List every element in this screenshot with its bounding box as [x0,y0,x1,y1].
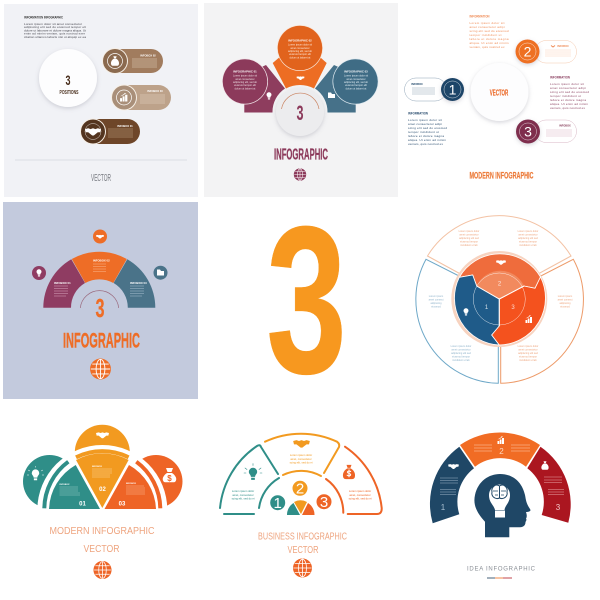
icon: globe [90,359,111,379]
sector: orange 02: 02 [99,487,106,493]
badges: 2 [296,481,304,498]
text blocks: incididunt ut lab [452,359,470,362]
text: information navy: aliqua. Ut enim ad minim [408,138,446,142]
circle: item 01: Lorem ipsum dolor sit [233,74,257,78]
sector: red 03 [104,465,156,509]
icon: folder badge [154,266,168,280]
circle: item 01: eiusmod tempor elit [234,84,256,87]
badges: 1 [274,495,282,512]
text: information orange: tempor incididunt ut [470,33,502,37]
person mini chart [287,500,315,515]
circle: item 02: INFOGRAPHIC 02 [288,38,312,42]
subtitle: vector: VECTOR [288,545,318,556]
circle: item 03: Lorem ipsum dolor sit [344,74,368,78]
heading: information infographic: enim ad minim veniam, quis nostrud exer [24,32,85,36]
outline: right segment [501,259,583,383]
text: information maroon [550,76,589,110]
bulb with brain [489,484,510,518]
circle: item 03: dolum ut laboret at [346,88,367,90]
icon: bag [526,315,532,323]
outline: teal [220,445,279,514]
segment: red 3: 3 [556,503,561,512]
title: idea infographic: IDEA INFOGRAPHIC [467,566,536,572]
text: information orange: labore et dolore magna [470,37,509,41]
panel: three positions brown [4,4,198,197]
text blocks [429,230,573,362]
text: information maroon: aliqua. Ut enim ad minim [550,102,588,106]
pill: item 03 [111,84,171,110]
text blocks: Lorem ipsum dolor [232,489,254,493]
title: infographic: INFOGRAPHIC [63,330,140,352]
icon: folder [328,92,335,98]
text blocks: adipiscing [559,302,571,305]
icon: bulb badge [32,266,46,280]
dome: teal [23,455,76,508]
arc accent [80,291,119,308]
sector: orange 02: INFOBOX [92,466,103,468]
numbers: 2 [498,282,502,288]
icon: globe [294,168,306,181]
sector: red 03: INFOBOX [126,483,137,485]
dome: orange [75,425,130,480]
text blocks: Lorem ipsum dolor [290,453,312,457]
pill: item 3: 3 [524,124,532,140]
circle: item 03: adipiscing elit, sed do [344,81,369,84]
text blocks: eiusmod tempor [452,356,470,358]
icon: bulb [464,308,468,316]
segment labels [54,258,147,296]
pill: item 1 [404,78,464,101]
segment labels: INFOBOX 03 [130,281,147,285]
segment: navy 1 [430,447,474,523]
pill: item 02: INFOBOX 02 [140,54,156,58]
heading: information infographic [24,16,86,39]
segment: navy 1: 1 [441,503,446,512]
panel: three circles infographic: INFOGRAPHIC [274,146,328,164]
text: information navy: INFORMATION [408,112,428,116]
icon: bag [163,468,176,483]
segment: blue [315,65,356,112]
segment: maroon [43,259,85,308]
icon: globe [293,558,312,578]
text blocks: adipiscing elit sed [518,237,538,240]
underline accent [487,577,512,579]
pill: item 3 [516,120,576,144]
circle: item 02: dolum ut laboret at [290,56,311,60]
text blocks: amet consect [429,298,444,302]
outline: orange [265,434,339,476]
numbers: 1 [485,305,489,311]
text blocks: adipiscing elit sed [518,352,538,355]
icon: handshake [296,76,304,80]
sector: red 03: 03 [119,502,126,508]
head silhouette [474,474,530,537]
text blocks: adipiscing elit sed [459,237,479,240]
text: information navy [408,112,447,146]
text blocks: eiusmod tempor [460,240,478,244]
pill: item 01: INFOBOX 01 [117,124,133,128]
text: information orange: INFORMATION [470,14,490,18]
pill: item 02 [102,48,163,74]
disc: top [459,254,540,299]
circle: item 01: INFOGRAPHIC 01 [233,70,257,74]
text: information navy: veniam, quis nostrud ex [408,142,444,146]
text blocks: scing elit, sed do ei [290,460,313,464]
text blocks: amet, consectetur [349,493,371,497]
inner ring and dividers [473,273,525,326]
heading: information infographic: INFORMATION INFOGRAPHIC [24,16,63,20]
outline: left segment [416,259,498,383]
text blocks: incididunt ut lab [519,244,537,247]
circle: item 03: amet consectetur [346,78,366,81]
text: information maroon: amet consectetur adipi [550,86,586,90]
text blocks: scing elit, sed do ei [349,496,372,500]
sector: orange 02 [76,453,129,508]
text blocks: Lorem ipsum dolor [349,489,371,493]
text blocks [232,453,372,500]
text blocks: Lorem ipsum dolor [459,230,480,233]
numbers [485,282,515,311]
inner top sector [477,271,524,299]
text: information orange: veniam, quis nostrud ex [470,45,505,49]
panel: cloud infographic [20,425,185,579]
panel: idea infographic [430,433,571,578]
dome: red-orange [130,455,182,508]
text blocks: Lorem ipsum [558,295,572,298]
text: information orange: Lorem ipsum dolor sit [470,21,505,25]
text blocks: incididunt ut lab [519,359,537,362]
badges: 3 [320,494,328,511]
icon: handshake badge [93,230,107,244]
outline: top segment [428,216,571,274]
icon: handshake [496,260,506,265]
circle: item 01 [222,58,268,104]
icons [244,440,355,480]
text: information maroon: Lorem ipsum dolor sit [550,82,584,86]
text: information navy: Lorem ipsum dolor sit [408,118,442,122]
text: information navy: amet consectetur adipi [408,122,442,126]
text: information maroon: tempor incididunt ut [550,94,581,98]
text blocks: eiusmod tempor [519,240,537,244]
icon: globe [93,561,112,579]
subtitle: vector: VECTOR [84,544,120,555]
center circle: 3 positions: POSITIONS [60,90,79,96]
circle: item 03: eiusmod tempor elit [345,84,367,87]
segment: orange [72,252,127,283]
icon: bulb [27,466,44,480]
text blocks: Lorem ipsum dolor [518,345,539,348]
circle: item 01: amet consectetur [235,78,255,81]
text blocks: amet, consectetur [290,457,312,461]
panel: circular three-part diagram [416,216,583,383]
title: modern infographic: MODERN INFOGRAPHIC [50,526,154,537]
text blocks: amet consectetur [459,234,479,236]
text blocks: amet consectetur [518,348,538,352]
text blocks: amet, consectetur [232,493,254,497]
panel: half-ring infographic on slate [3,202,198,399]
pill: item 1: INFOBOX [411,83,423,86]
text: information orange: amet consectetur adipi [470,25,505,29]
circle: item 01: adipiscing elit, sed do [233,81,258,84]
big number 3: 3 [266,184,347,418]
circle: item 01: dolum ut laboret at [235,88,256,90]
text blocks: amet consect [558,298,573,302]
circle: item 02: adipiscing elit, sed do [288,50,313,53]
text blocks: adipiscing elit sed [451,352,471,355]
heading: information infographic: Lorem ipsum dolor sit amet consectetur [24,22,82,26]
text: information navy: tempor incididunt ut [408,130,439,134]
disc: right [492,277,545,345]
heading: information infographic: adipiscing elit sed do eiusmod tempor elt [24,25,86,29]
numbers: 3 [511,305,515,311]
text blocks: scing elit, sed do ei [232,496,255,500]
sector: teal 01: INFOBOX [60,484,70,486]
icon: bag: $ [167,474,172,483]
pill: item 01 [80,118,140,144]
center circle: 3 positions [39,49,97,107]
badges [270,481,332,512]
title: business infographic: BUSINESS INFOGRAPHIC [258,532,347,542]
segment: orange [273,50,327,88]
segment: orange 2 [460,433,540,467]
panel: three positions brown: VECTOR [91,173,111,184]
text blocks: amet consectetur [518,234,538,236]
number: 3: 3 [96,293,104,323]
text blocks: Lorem ipsum dolor [518,230,539,233]
text blocks: Lorem ipsum [429,295,443,298]
icon: handshake [96,432,109,438]
pill: item 2: 2 [524,44,532,60]
center circle: vector [470,63,528,121]
panel: modern infographic numbered [404,14,589,180]
text blocks: Lorem ipsum dolor [451,345,472,348]
text: information maroon: INFORMATION [550,76,570,80]
circle: item 02 [277,25,323,71]
text: information navy: scing elit sed do eiusmod [408,126,447,130]
text: information maroon: labore et dolore magna [550,98,586,102]
circle: item 02: amet consectetur [290,47,310,50]
stripes [44,451,160,508]
text: information maroon: veniam, quis nostrud ex [550,106,586,110]
text: information maroon: scing elit sed do eiusmod [550,90,589,94]
text blocks: adipiscing [430,302,442,305]
center circle: 3 positions: 3 [66,72,71,88]
text: information orange: aliqua. Ut enim ad minim [470,41,509,45]
text blocks: eiusmod [560,306,570,308]
panel: three circles infographic [204,3,398,197]
sector: teal 01 [49,465,100,509]
segment labels: INFOBOX 02 [93,258,110,262]
outline: red [326,447,382,514]
pill: item 03: INFOBOX 03 [147,89,163,93]
segment: maroon [244,65,285,112]
text: information orange: scing elit sed do eiusmod [470,29,509,33]
center circle: 3: 3 [296,102,304,125]
disc: left [454,275,499,345]
text blocks: amet consectetur [451,348,471,352]
icon: bulb [266,92,272,100]
circle: item 03: INFOGRAPHIC 03 [344,70,368,74]
segment: orange 2: 2 [499,447,504,456]
title: modern infographic: MODERN INFOGRAPHIC [470,170,534,180]
pill: item 2 [516,40,576,64]
segment: red 3 [527,447,571,523]
text blocks: eiusmod [431,306,441,308]
sector: teal 01: 01 [79,502,86,508]
center circle: 3 [276,88,324,136]
segment: blue [114,259,155,308]
circle: item 02: Lorem ipsum dolor sit [288,44,312,46]
pill: item 2: INFOBOX [557,45,569,48]
text blocks: eiusmod tempor [519,356,537,358]
circle: item 03 [332,58,378,104]
heading: information infographic: citation ullamco laboris nisi ut aliquip ex ea [24,35,86,39]
circle: item 02: eiusmod tempor elit [289,53,311,56]
center circle: vector: VECTOR [490,88,508,98]
panel: business infographic outline [220,434,382,578]
text: information navy: labore et dolore magna [408,134,444,138]
pill: item 3: INFOBOX [559,124,571,128]
text: information orange [470,14,509,49]
text blocks: incididunt ut lab [460,244,478,247]
pill: item 1: 1 [449,82,457,98]
heading: information infographic: dolore ut laborare et dolore magna aliqua. Ut [24,28,86,32]
segment labels: INFOBOX 01 [54,281,71,285]
